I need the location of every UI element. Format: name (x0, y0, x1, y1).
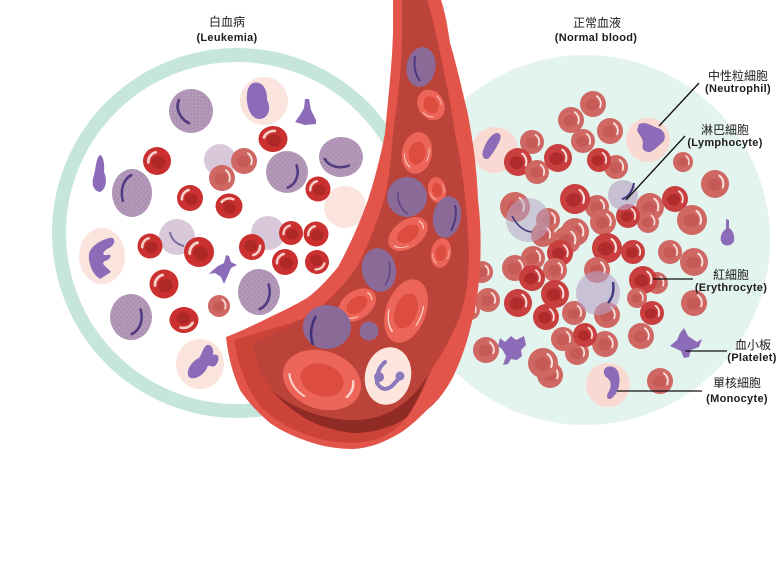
vessel leukemia cells (303, 45, 464, 349)
label: leukemia: (Leukemia) (196, 32, 258, 44)
circle: normal blood background (400, 55, 770, 425)
vessel white blood cell (359, 343, 417, 409)
normal blood nuclei (482, 123, 665, 399)
vessel outer wall (226, 0, 481, 449)
leukemia white cell nuclei (89, 82, 269, 378)
vessel lumen (253, 0, 469, 433)
normal blood lymphocytes (506, 180, 638, 315)
callout: neutrophil: (Neutrophil) (705, 83, 771, 95)
callout: monocyte: 單核細胞 (713, 376, 761, 390)
callout: erythrocyte (653, 268, 767, 294)
vessel lumen shadow (270, 375, 428, 433)
callout: neutrophil (659, 68, 771, 126)
leukemia pale cells (79, 77, 366, 389)
callout: platelet: (Platelet) (727, 352, 777, 364)
label: leukemia: 白血病 (209, 14, 245, 29)
normal blood red blood cells (460, 91, 729, 394)
label: leukemia (196, 14, 258, 44)
label: normal blood: 正常血液 (573, 15, 621, 30)
label: normal blood (555, 15, 637, 44)
circle: leukemia ring (59, 55, 415, 411)
callout: lymphocyte (626, 123, 763, 200)
callout: lymphocyte: (Lymphocyte) (687, 137, 763, 149)
label: normal blood: (Normal blood) (555, 32, 637, 44)
vessel red blood cells (275, 85, 453, 420)
normal blood platelets (498, 219, 734, 365)
callout: erythrocyte: 紅細胞 (713, 268, 749, 282)
normal blood pale cells (472, 118, 670, 407)
callout: lymphocyte: 淋巴細胞 (701, 123, 749, 137)
leukemia lymphoblasts (101, 89, 372, 350)
callout: monocyte: (Monocyte) (706, 393, 768, 405)
leukemia platelets (93, 99, 316, 284)
vessel lower-left wall shade (234, 320, 407, 443)
callout: platelet (685, 338, 777, 364)
callout: platelet: 血小板 (735, 338, 771, 352)
leukemia red blood cells (138, 122, 332, 338)
callout: neutrophil: 中性粒細胞 (708, 68, 768, 83)
callout: monocyte (617, 376, 768, 405)
callout: erythrocyte: (Erythrocyte) (695, 282, 767, 294)
blood vessel (226, 0, 481, 449)
